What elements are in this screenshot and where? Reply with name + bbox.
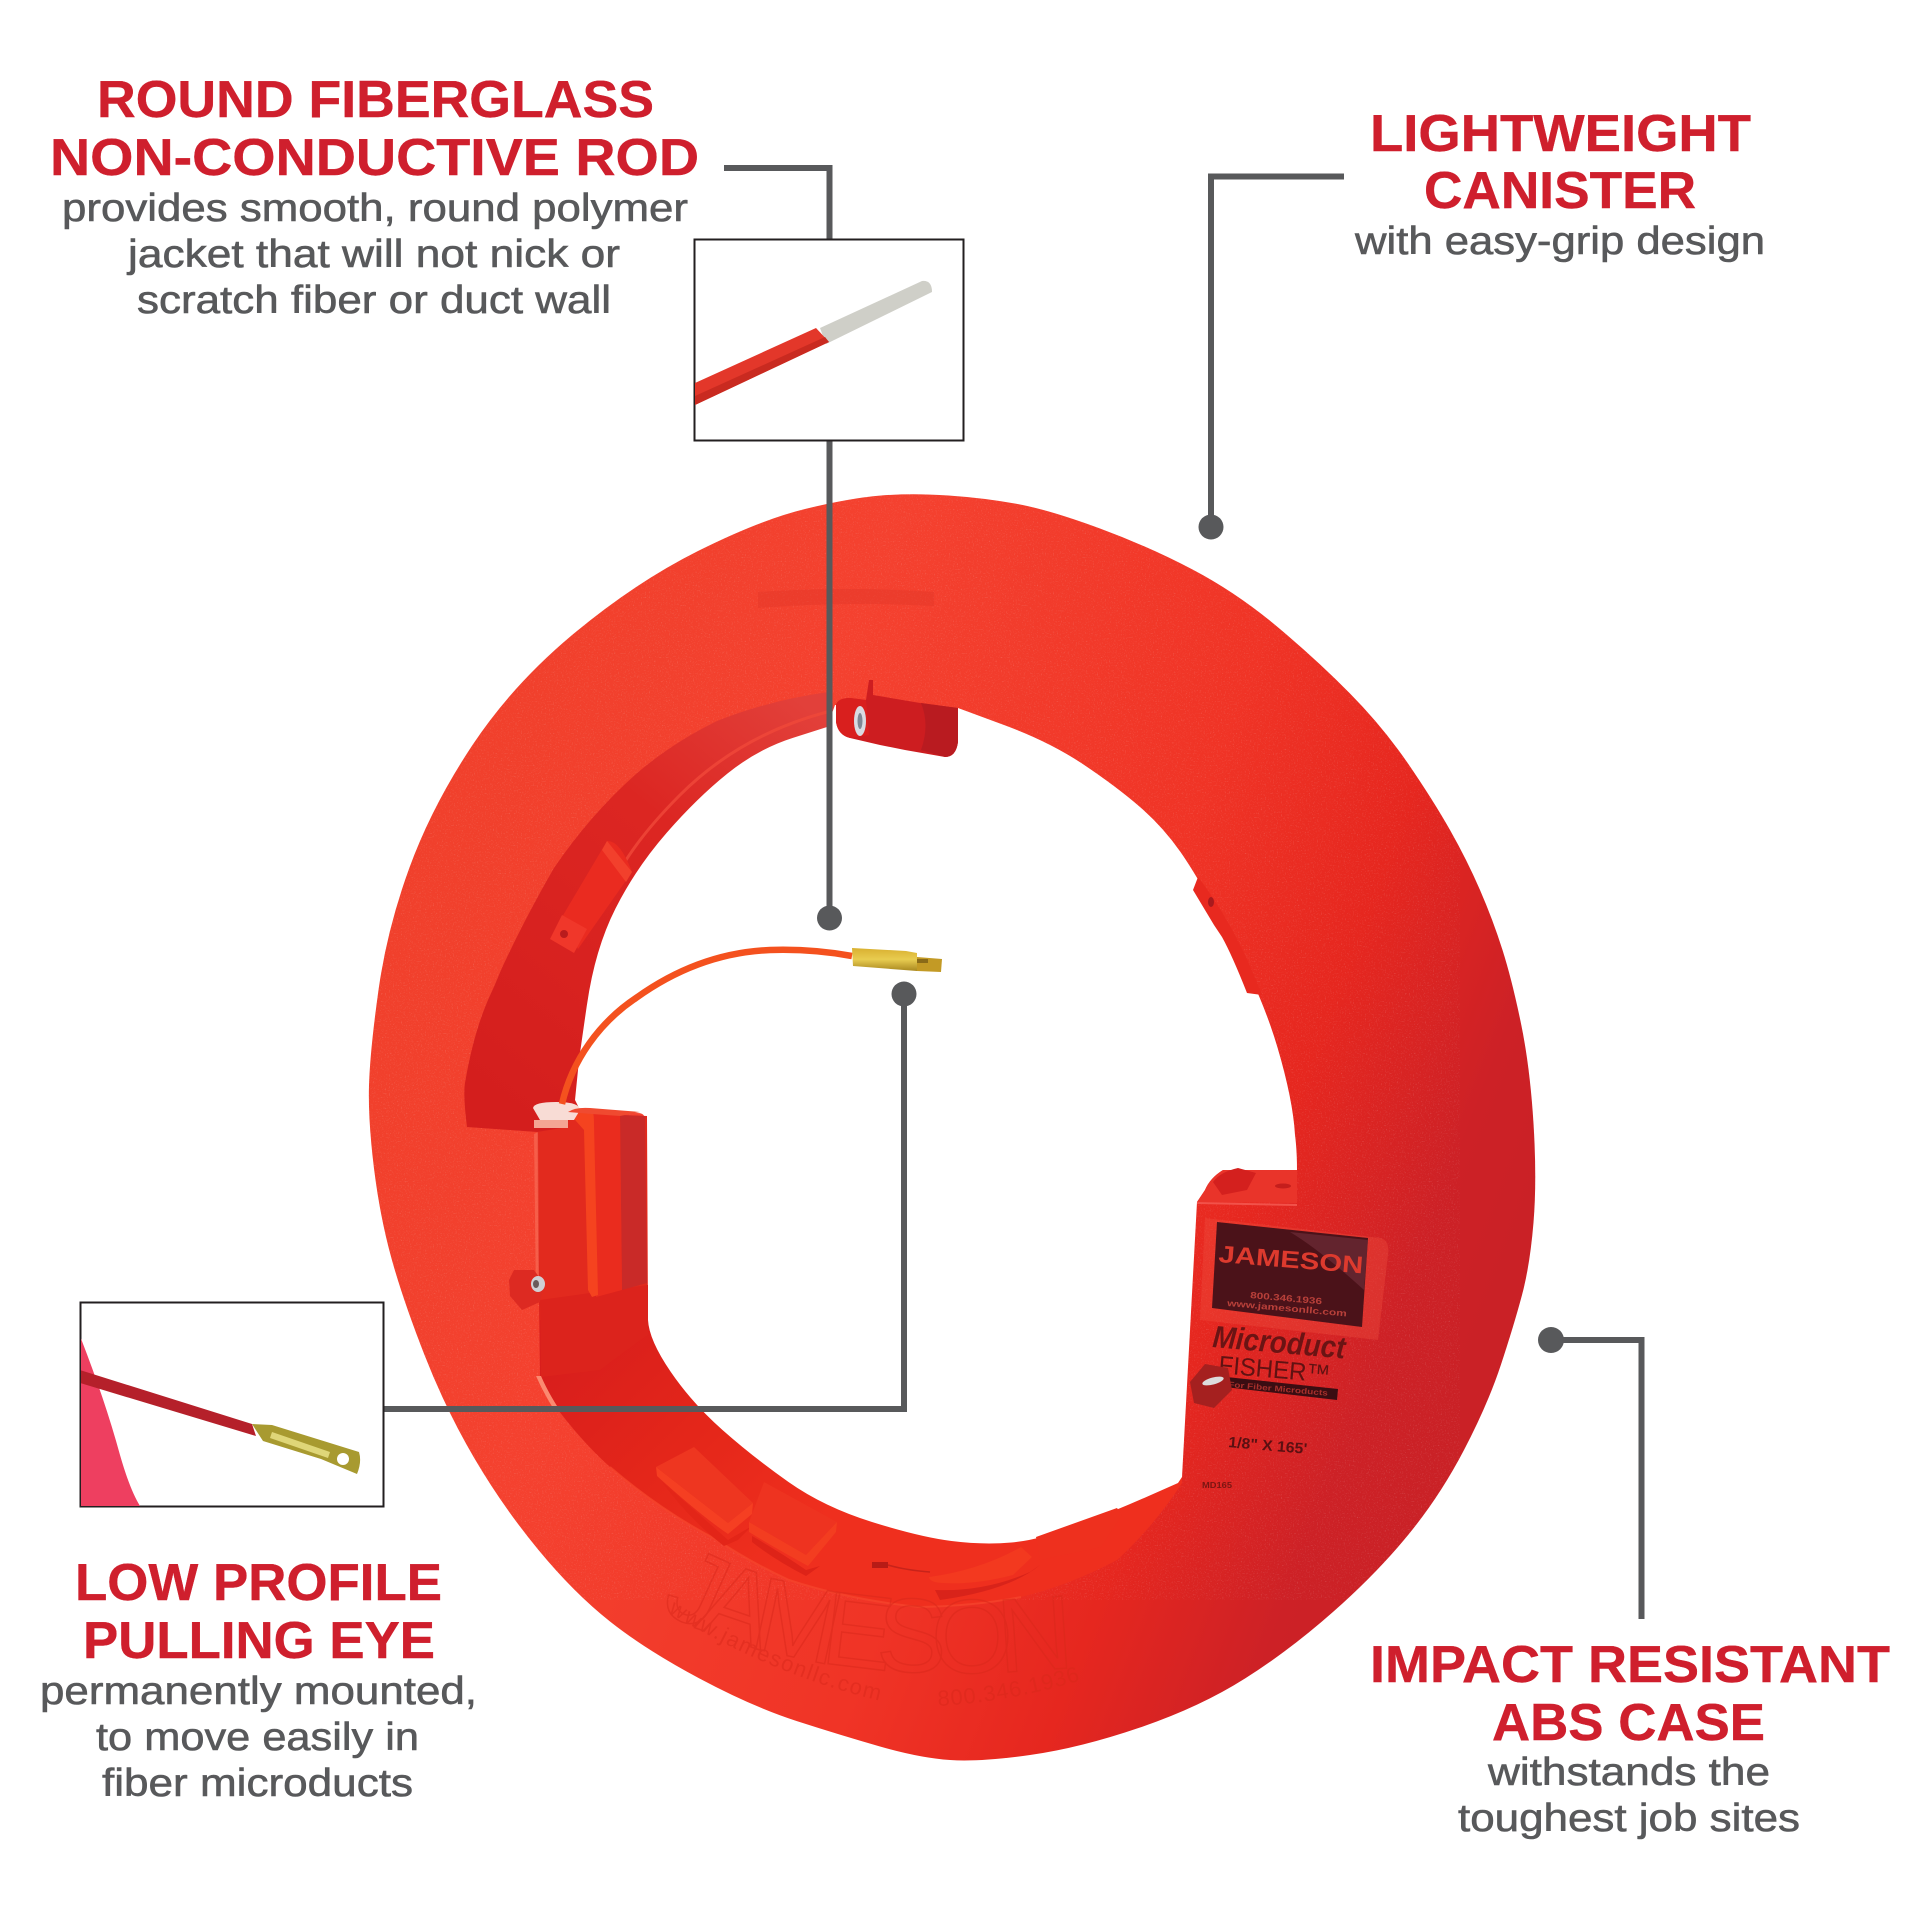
model number: MD165 <box>1202 1481 1233 1490</box>
hex screw <box>509 1270 545 1310</box>
heading: ABS CASE <box>1492 1694 1765 1752</box>
product name: Microduct <box>1211 1319 1348 1366</box>
right clip tab <box>1193 877 1262 995</box>
heading <box>50 71 699 187</box>
description: with easy-grip design <box>1354 220 1765 263</box>
heading: LOW PROFILE <box>75 1554 442 1612</box>
right label block <box>1190 1168 1388 1490</box>
size text: 1/8" X 165' <box>1228 1434 1308 1458</box>
right clip hole <box>1208 897 1214 907</box>
description <box>62 187 688 322</box>
description: toughest job sites <box>1458 1797 1800 1840</box>
heading: ROUND FIBERGLASS <box>97 71 654 129</box>
embossed JAMESON branding: www.jamesonllc.com <box>671 1602 880 1700</box>
description <box>40 1670 477 1805</box>
fiberglass rod with pulling eye <box>562 948 942 1104</box>
left clip tab <box>550 841 632 953</box>
sticker dark panel with brand <box>1212 1222 1368 1327</box>
inset: pulling eye close-up <box>80 1302 384 1506</box>
sticker <box>1200 1218 1388 1340</box>
inner channel, lower lip <box>537 1130 1182 1607</box>
embossed label plate on top of ring <box>758 589 934 608</box>
canister outer body <box>369 494 1535 1760</box>
product name <box>1211 1319 1348 1400</box>
description: scratch fiber or duct wall <box>137 279 611 322</box>
connector: canister callout <box>1198 176 1344 540</box>
description: permanently mounted, <box>40 1670 477 1713</box>
heading <box>75 1554 442 1670</box>
product: orange fiber fisher canister ring <box>368 494 1536 1760</box>
heading <box>1370 105 1751 220</box>
description: fiber microducts <box>102 1762 413 1805</box>
callout: lightweight canister <box>1354 105 1765 263</box>
inset: rod cross-section <box>694 240 964 440</box>
inner channel, upper left <box>464 692 850 1132</box>
left clamp block <box>509 1110 648 1408</box>
heading: PULLING EYE <box>83 1612 435 1670</box>
heading: CANISTER <box>1424 162 1696 220</box>
description: jacket that will not nick or <box>127 233 620 276</box>
centre opening <box>575 705 1297 1543</box>
description: to move easily in <box>96 1716 419 1759</box>
embossed JAMESON branding: 800.346.1936 <box>938 1682 1020 1706</box>
sticker dark panel with brand: 800.346.1936 <box>1250 1290 1322 1306</box>
callout: impact resistant ABS case <box>1370 1636 1890 1840</box>
callout: low profile pulling eye <box>40 1554 477 1805</box>
description: provides smooth, round polymer <box>62 187 688 230</box>
hex screw on label <box>1190 1364 1232 1408</box>
heading <box>1370 1636 1890 1752</box>
connector: pulling eye callout <box>383 982 916 1409</box>
product name: FISHER™ <box>1217 1351 1331 1389</box>
heading: IMPACT RESISTANT <box>1370 1636 1890 1694</box>
embossed JAMESON branding: JAMESON <box>666 1553 1062 1674</box>
top hinge <box>836 680 958 757</box>
channel highlight <box>620 712 827 870</box>
product name: For Fiber Microducts <box>1228 1380 1329 1398</box>
white bushing <box>533 1102 580 1128</box>
lower lip edge highlight <box>610 1467 1021 1607</box>
description <box>1458 1751 1800 1840</box>
heading: LIGHTWEIGHT <box>1370 105 1751 163</box>
sticker dark panel with brand: JAMESON <box>1218 1241 1364 1279</box>
rod clip on clamp block <box>568 1108 640 1116</box>
description: withstands the <box>1487 1751 1770 1794</box>
callout: round fiberglass non-conductive rod <box>50 71 699 322</box>
bottom clip tabs <box>656 1447 1122 1600</box>
connector: rod callout to inset and rod tip <box>724 168 842 930</box>
heading: NON-CONDUCTIVE ROD <box>50 129 699 187</box>
sticker dark panel with brand: www.jamesonllc.com <box>1226 1298 1347 1318</box>
connector: impact resistant callout <box>1538 1327 1642 1619</box>
